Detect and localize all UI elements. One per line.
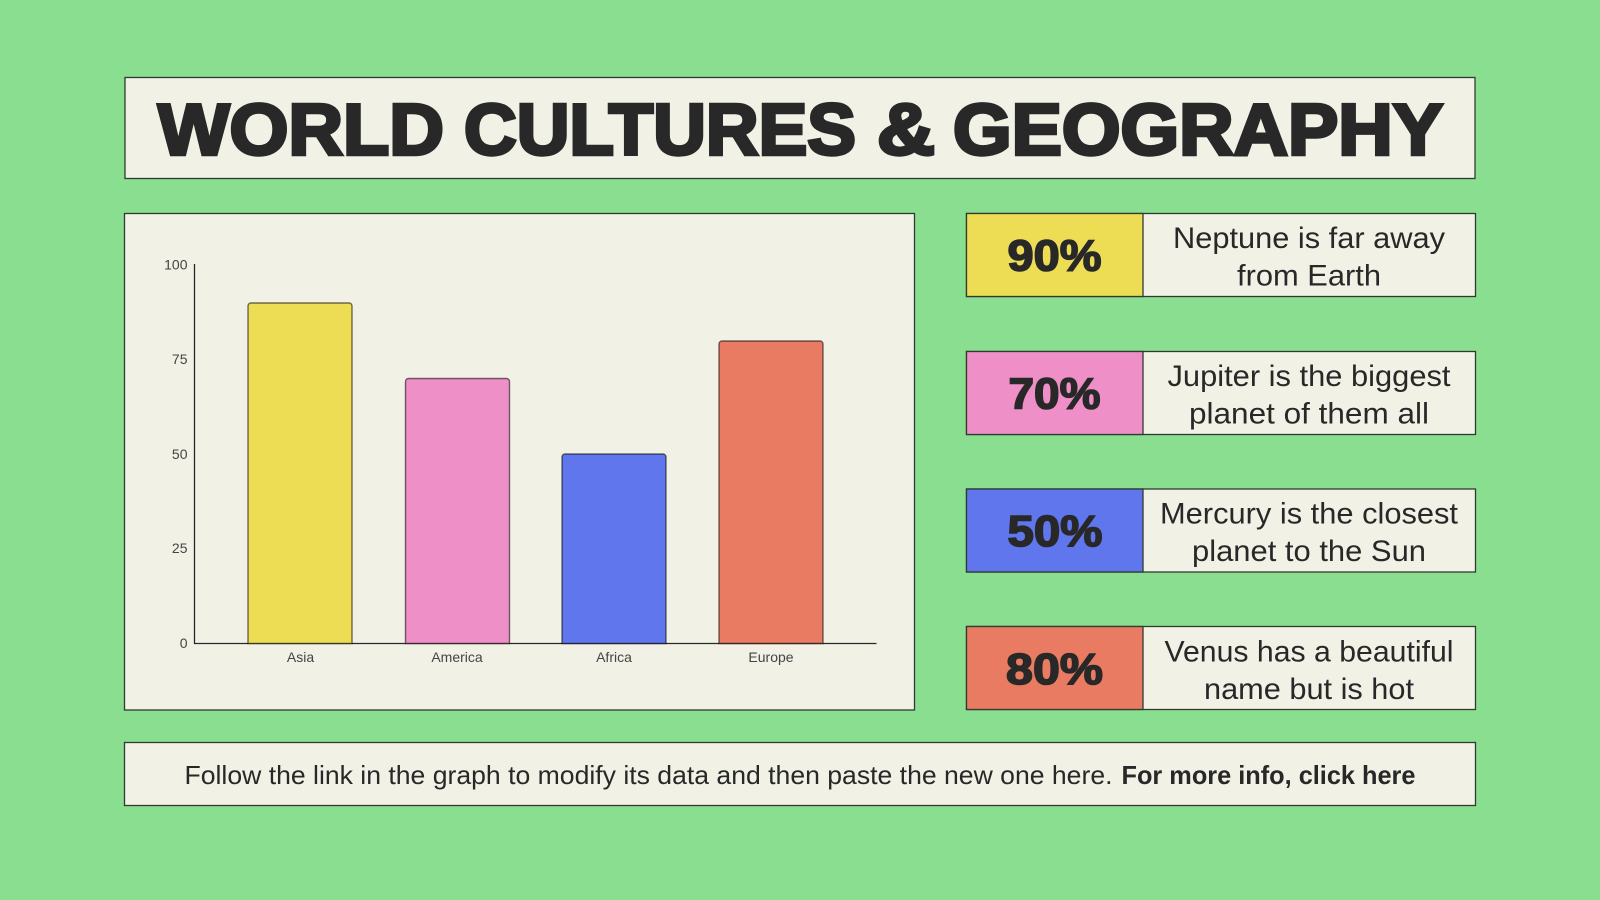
category labels: Asia	[287, 649, 314, 665]
title: WORLD	[158, 90, 444, 170]
panel: stat Venus	[966, 626, 1476, 710]
stat swatch: blue	[966, 489, 1143, 572]
stat value: 90%: 90%	[1008, 232, 1102, 280]
stat description: Mercury is the closest	[1160, 498, 1459, 530]
stat value: 70%: 70%	[1008, 370, 1100, 418]
bar: Europe 80	[719, 341, 823, 644]
stat description: planet to the Sun	[1192, 535, 1426, 568]
title: &	[877, 90, 935, 170]
footer link text: For more info, click here	[1122, 760, 1416, 790]
y axis labels: 75	[172, 351, 188, 367]
stat swatch: pink	[966, 352, 1143, 434]
category labels	[287, 649, 794, 665]
panel: stat Jupiter	[966, 352, 1476, 434]
y axis labels	[164, 256, 188, 651]
stat swatch: coral	[966, 626, 1143, 710]
stat description	[1164, 636, 1454, 706]
stat description: Jupiter is the biggest	[1168, 360, 1451, 393]
stat description: from Earth	[1237, 260, 1381, 292]
bar: Africa 50	[562, 454, 666, 644]
title: CULTURES	[464, 90, 856, 170]
stat description: planet of them all	[1189, 398, 1429, 430]
stat swatch: yellow	[966, 214, 1143, 296]
category labels: Europe	[748, 649, 794, 665]
bar: Asia 90	[248, 303, 352, 644]
panel: bar chart	[124, 214, 914, 710]
y axis labels: 25	[172, 540, 188, 556]
panel: footer note	[124, 742, 1476, 806]
panel: stat Neptune	[966, 214, 1476, 296]
stat description: Venus has a beautiful	[1164, 636, 1454, 668]
y axis labels: 100	[164, 256, 188, 272]
y axis labels: 50	[172, 446, 188, 462]
stat description	[1173, 222, 1445, 292]
title	[158, 90, 1443, 170]
title: GEOGRAPHY	[953, 90, 1443, 170]
category labels: America	[431, 649, 483, 665]
stat value: 80%: 80%	[1006, 645, 1103, 694]
y axis labels: 0	[180, 635, 188, 651]
stat description: Neptune is far away	[1173, 222, 1445, 255]
category labels: Africa	[596, 649, 632, 665]
bar: America 70	[406, 378, 510, 644]
panel: title banner	[125, 78, 1475, 178]
panel: stat Mercury	[966, 489, 1476, 572]
stat description	[1168, 360, 1451, 430]
chart axes	[194, 264, 876, 644]
footer text: Follow the link in the graph to modify its data and then paste the new one here.	[184, 760, 1112, 790]
stat value: 50%: 50%	[1008, 507, 1102, 556]
stat description: name but is hot	[1204, 673, 1415, 706]
stat description	[1160, 498, 1459, 568]
